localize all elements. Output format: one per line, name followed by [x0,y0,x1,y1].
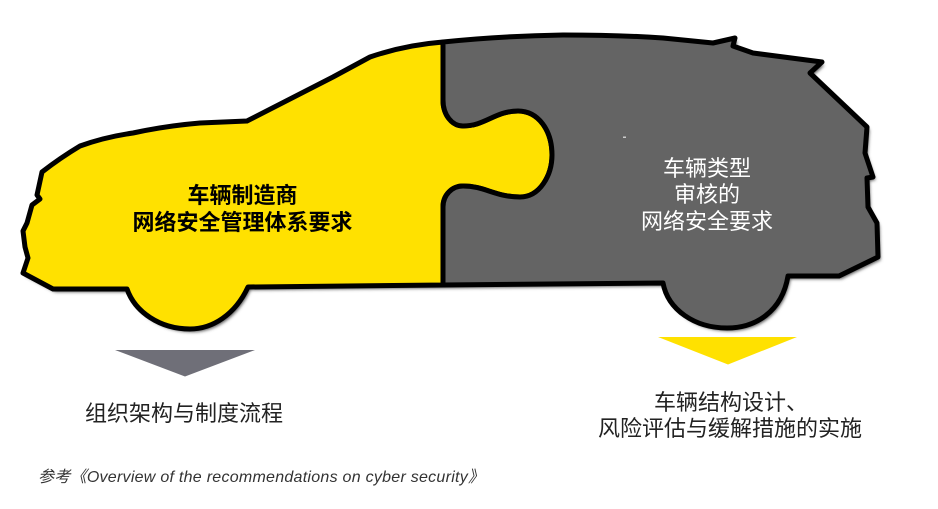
speck on grey panel [623,136,626,138]
arrow: yellow triangle [658,337,797,364]
heading: manufacturer requirements [132,183,353,235]
car: grey puzzle piece [443,35,878,328]
label: vehicle design and risk mitigation [598,390,862,441]
heading: manufacturer requirements: 车辆制造商 [187,183,298,208]
label: organisation and process: 组织架构与制度流程 [85,401,283,426]
source note: 参考《Overview of the recommendations on cyber security》 [38,468,484,486]
heading: vehicle type requirements: 车辆类型 [663,156,751,181]
arrow: grey triangle [115,350,255,376]
heading: vehicle type requirements: 网络安全要求 [641,209,773,234]
label: vehicle design and risk mitigation: 风险评估与缓解措施的实施 [598,416,862,441]
label: vehicle design and risk mitigation: 车辆结构设计、 [654,390,808,415]
heading: vehicle type requirements: 审核的 [674,182,740,207]
car shadow [26,38,880,332]
heading: manufacturer requirements: 网络安全管理体系要求 [132,210,353,235]
heading: vehicle type requirements [641,156,773,234]
car: yellow puzzle piece [23,42,552,329]
